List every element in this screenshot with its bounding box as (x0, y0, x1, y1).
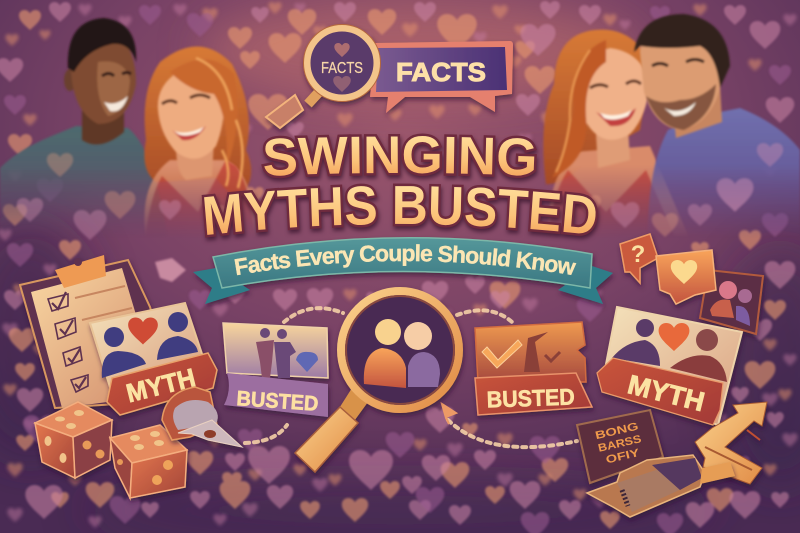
facts magnifier and speech bubble (266, 24, 513, 128)
woman: face (158, 58, 243, 188)
check icons (482, 340, 522, 368)
people card (700, 270, 763, 334)
stray heart tag (155, 258, 186, 282)
right icon bubbles (620, 234, 763, 334)
ribbon body (213, 238, 592, 288)
couple: left (0, 18, 256, 240)
ribbon tails (193, 268, 250, 304)
couple: right (543, 14, 800, 250)
myth banner (597, 358, 723, 425)
question bubble: ? (631, 241, 645, 268)
woman: hair back (543, 30, 650, 184)
man: head (64, 18, 136, 144)
whistle icon (162, 387, 242, 447)
label: facts: FACTS (396, 57, 486, 87)
man: head (634, 14, 730, 138)
guitar key icon (695, 402, 767, 484)
sign text (594, 421, 645, 467)
lens (341, 291, 459, 409)
die: left (35, 402, 112, 478)
question bubble (620, 234, 658, 283)
handle (295, 388, 368, 472)
title (200, 134, 602, 242)
myth banner: MYTH (625, 369, 708, 417)
couple silhouette (256, 328, 296, 378)
silhouettes and heart (102, 312, 198, 378)
myth banner: MYTH (123, 362, 198, 408)
magnifier lens (304, 24, 380, 102)
myth card: right (597, 307, 742, 425)
man: shirt (0, 125, 162, 225)
checklist (48, 286, 132, 392)
heart bubble (656, 250, 716, 304)
speech bubble (370, 41, 513, 113)
center magnifier (295, 291, 459, 472)
man: shirt (648, 107, 800, 224)
sign board (577, 410, 663, 483)
title line 2: MYTHS BUSTED (200, 184, 602, 242)
magnifier handle (266, 92, 319, 128)
woman: body and dress (144, 159, 255, 230)
silhouettes and heart (612, 319, 727, 382)
woman: body and dress (548, 144, 684, 232)
hearts over figures (17, 143, 783, 240)
busted banner: BUSTED (236, 387, 319, 416)
sign text: BONG (594, 421, 640, 442)
ribbon banner (193, 237, 615, 308)
busted card: right (475, 322, 592, 415)
busted card: left (223, 323, 328, 417)
myth card: left (90, 303, 217, 415)
dotted connector lines (245, 308, 577, 447)
sign text: OFIY (605, 447, 641, 466)
woman: face (552, 40, 650, 178)
label: facts small: FACTS (321, 60, 363, 77)
busted banner: BUSTED (486, 383, 575, 413)
dice (35, 402, 187, 498)
woman: hair back (144, 46, 251, 200)
people icon (364, 319, 440, 388)
arrow head (442, 404, 456, 424)
clipboard (20, 255, 178, 408)
pin icon (296, 352, 318, 372)
hand with device (587, 455, 735, 517)
sign text: BARSS (597, 433, 643, 455)
die: right (110, 425, 187, 498)
ribbon text: Facts Every Couple Should Know (234, 244, 576, 276)
title line 1: SWINGING (260, 134, 540, 184)
